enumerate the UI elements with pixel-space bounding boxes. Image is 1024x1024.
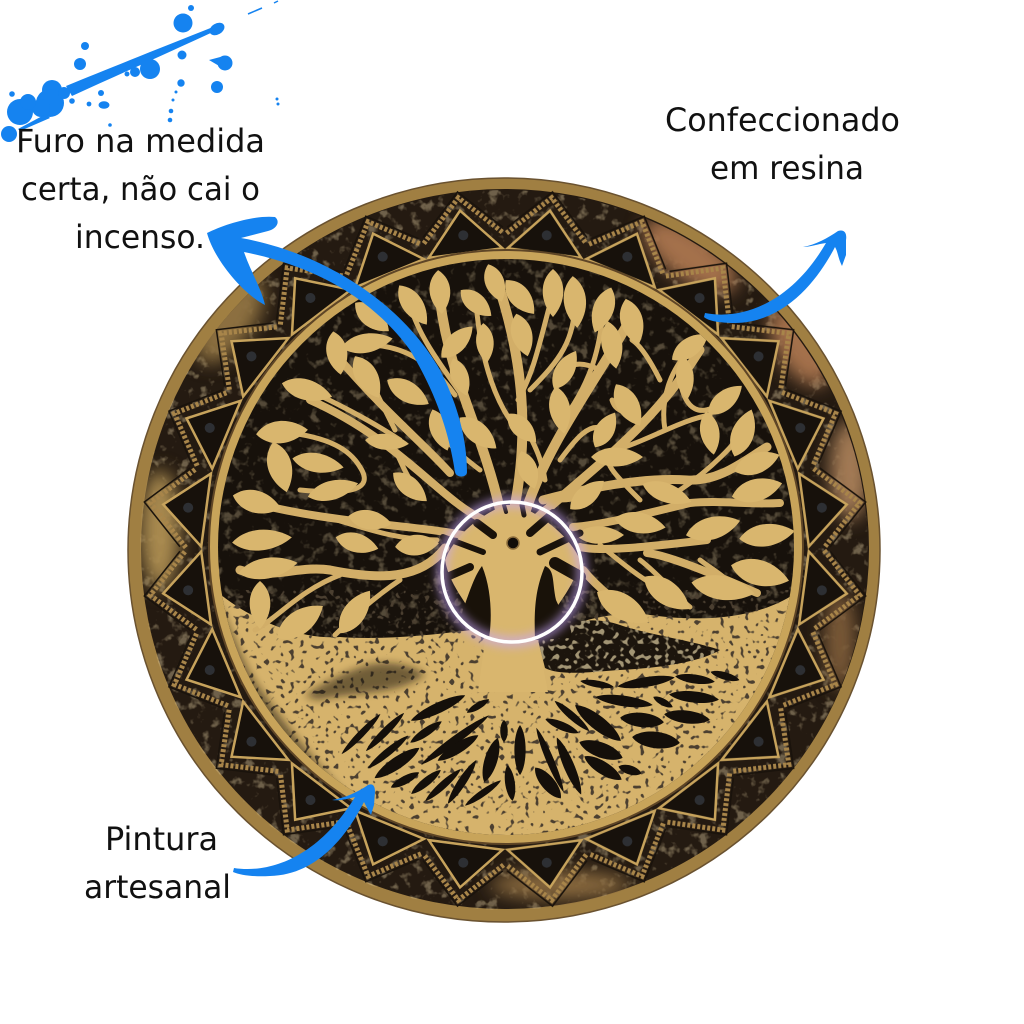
label: pintura artesanal bbox=[84, 820, 231, 906]
blue paint splatter bbox=[1, 1, 280, 142]
label: pintura artesanal: Pintura bbox=[105, 820, 218, 858]
arrow: to confeccionado label bbox=[704, 231, 846, 323]
label: pintura artesanal: artesanal bbox=[84, 868, 231, 906]
outer gold rim bbox=[128, 178, 880, 922]
arrow: from hole to furo label bbox=[207, 217, 467, 476]
dark speckled earth, right bbox=[538, 620, 720, 673]
label: furo na medida: Furo na medida bbox=[16, 122, 265, 160]
plate: round resin incense holder bbox=[128, 178, 880, 922]
glowing white ring around the hole bbox=[442, 502, 582, 642]
label: confeccionado em resina: em resina bbox=[710, 149, 864, 187]
branches bbox=[240, 290, 780, 635]
label: furo na medida: certa, não cai o bbox=[21, 170, 260, 208]
leaves bbox=[230, 261, 796, 648]
roots bbox=[339, 668, 740, 808]
tree of life bbox=[230, 261, 796, 808]
trunk dark slits bbox=[462, 566, 571, 640]
inner gold ring bbox=[209, 250, 803, 844]
trunk bbox=[445, 505, 580, 692]
incense hole bbox=[507, 537, 519, 549]
mandala band bbox=[139, 187, 871, 911]
inner dark disc bbox=[218, 259, 794, 835]
star pattern bbox=[139, 187, 871, 911]
label: confeccionado em resina bbox=[665, 101, 900, 187]
label: furo na medida: incenso. bbox=[75, 218, 205, 256]
dark speckled earth, lower left bbox=[224, 604, 428, 784]
arrow: to pintura label bbox=[233, 784, 375, 876]
label: confeccionado em resina: Confeccionado bbox=[665, 101, 900, 139]
ground bbox=[210, 590, 800, 845]
label: furo na medida bbox=[16, 122, 265, 256]
